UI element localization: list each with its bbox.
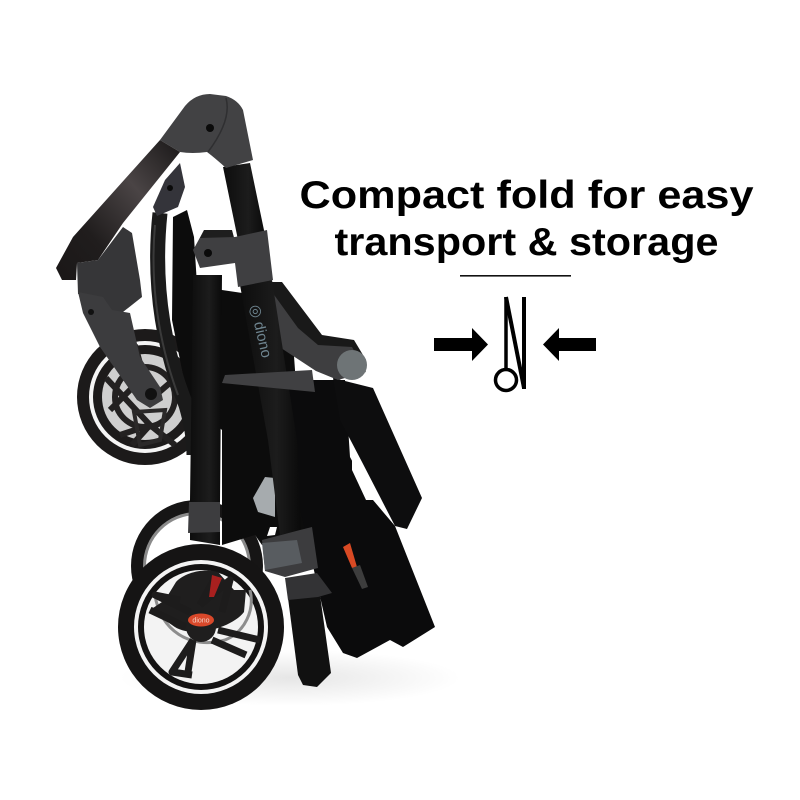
upper folded wheel bbox=[77, 329, 213, 465]
top hinge gray joint bbox=[160, 94, 253, 168]
wheel hub logo bbox=[188, 614, 214, 626]
red brake bbox=[209, 575, 222, 597]
gray cross bracket bbox=[222, 370, 315, 392]
mid gray clamp bbox=[193, 230, 273, 287]
divider line bbox=[460, 275, 571, 277]
folded foot tube bbox=[288, 595, 331, 687]
title: transport & storage bbox=[334, 221, 718, 264]
lower tube clamp bbox=[262, 527, 318, 577]
fork screws bbox=[88, 309, 157, 400]
folded seat upper fabric bbox=[333, 378, 422, 529]
front vertical tube bbox=[190, 275, 222, 545]
clamp gray panel bbox=[262, 540, 302, 570]
seat fabric behind frame bbox=[172, 210, 307, 545]
gray seat hinge arm bbox=[272, 292, 366, 380]
front wheel fork arm bbox=[78, 292, 163, 408]
fold glyph bbox=[496, 297, 524, 390]
upper arm joint bbox=[153, 163, 185, 216]
folded seat main fabric bbox=[285, 380, 435, 658]
right arrow bbox=[543, 328, 596, 361]
foot collar bbox=[285, 573, 332, 600]
tube highlight bbox=[154, 225, 178, 395]
stroller photo illustration bbox=[56, 94, 460, 710]
dark strap along seat bbox=[272, 282, 366, 371]
clamp screw bbox=[204, 249, 212, 257]
floor shadow bbox=[120, 650, 460, 706]
lower front sleeve bbox=[188, 502, 220, 533]
joint screw small bbox=[167, 185, 173, 191]
fabric tags bbox=[343, 543, 357, 568]
title: Compact fold for easy bbox=[300, 174, 754, 217]
wheel hub logo: diono bbox=[192, 618, 210, 624]
brake hub behind bbox=[150, 570, 246, 632]
curved inner tube bbox=[158, 213, 194, 455]
front wheel arm housing bbox=[77, 227, 142, 314]
fabric tag dark bbox=[352, 565, 368, 589]
rear wheel behind bbox=[131, 500, 263, 632]
icon: compact fold symbol bbox=[434, 297, 596, 390]
fabric gap bbox=[352, 458, 374, 500]
hinge end cap bbox=[337, 350, 367, 380]
main rear tube upper bbox=[223, 163, 265, 240]
main rear tube lower bbox=[240, 280, 301, 535]
clamp top fabric bbox=[196, 230, 236, 245]
spoke basket bbox=[134, 410, 165, 445]
left arrow bbox=[434, 328, 488, 361]
gray fabric tab bbox=[253, 477, 275, 517]
joint screw bbox=[206, 124, 214, 132]
inner rear wheel arc bbox=[155, 590, 251, 643]
diono logo on tube: ◎ diono bbox=[246, 303, 275, 359]
joint inner crease bbox=[208, 98, 227, 152]
title bbox=[300, 174, 754, 264]
main front wheel bbox=[118, 544, 284, 710]
handle bar bbox=[56, 140, 180, 280]
fabric gap small bbox=[267, 527, 277, 536]
